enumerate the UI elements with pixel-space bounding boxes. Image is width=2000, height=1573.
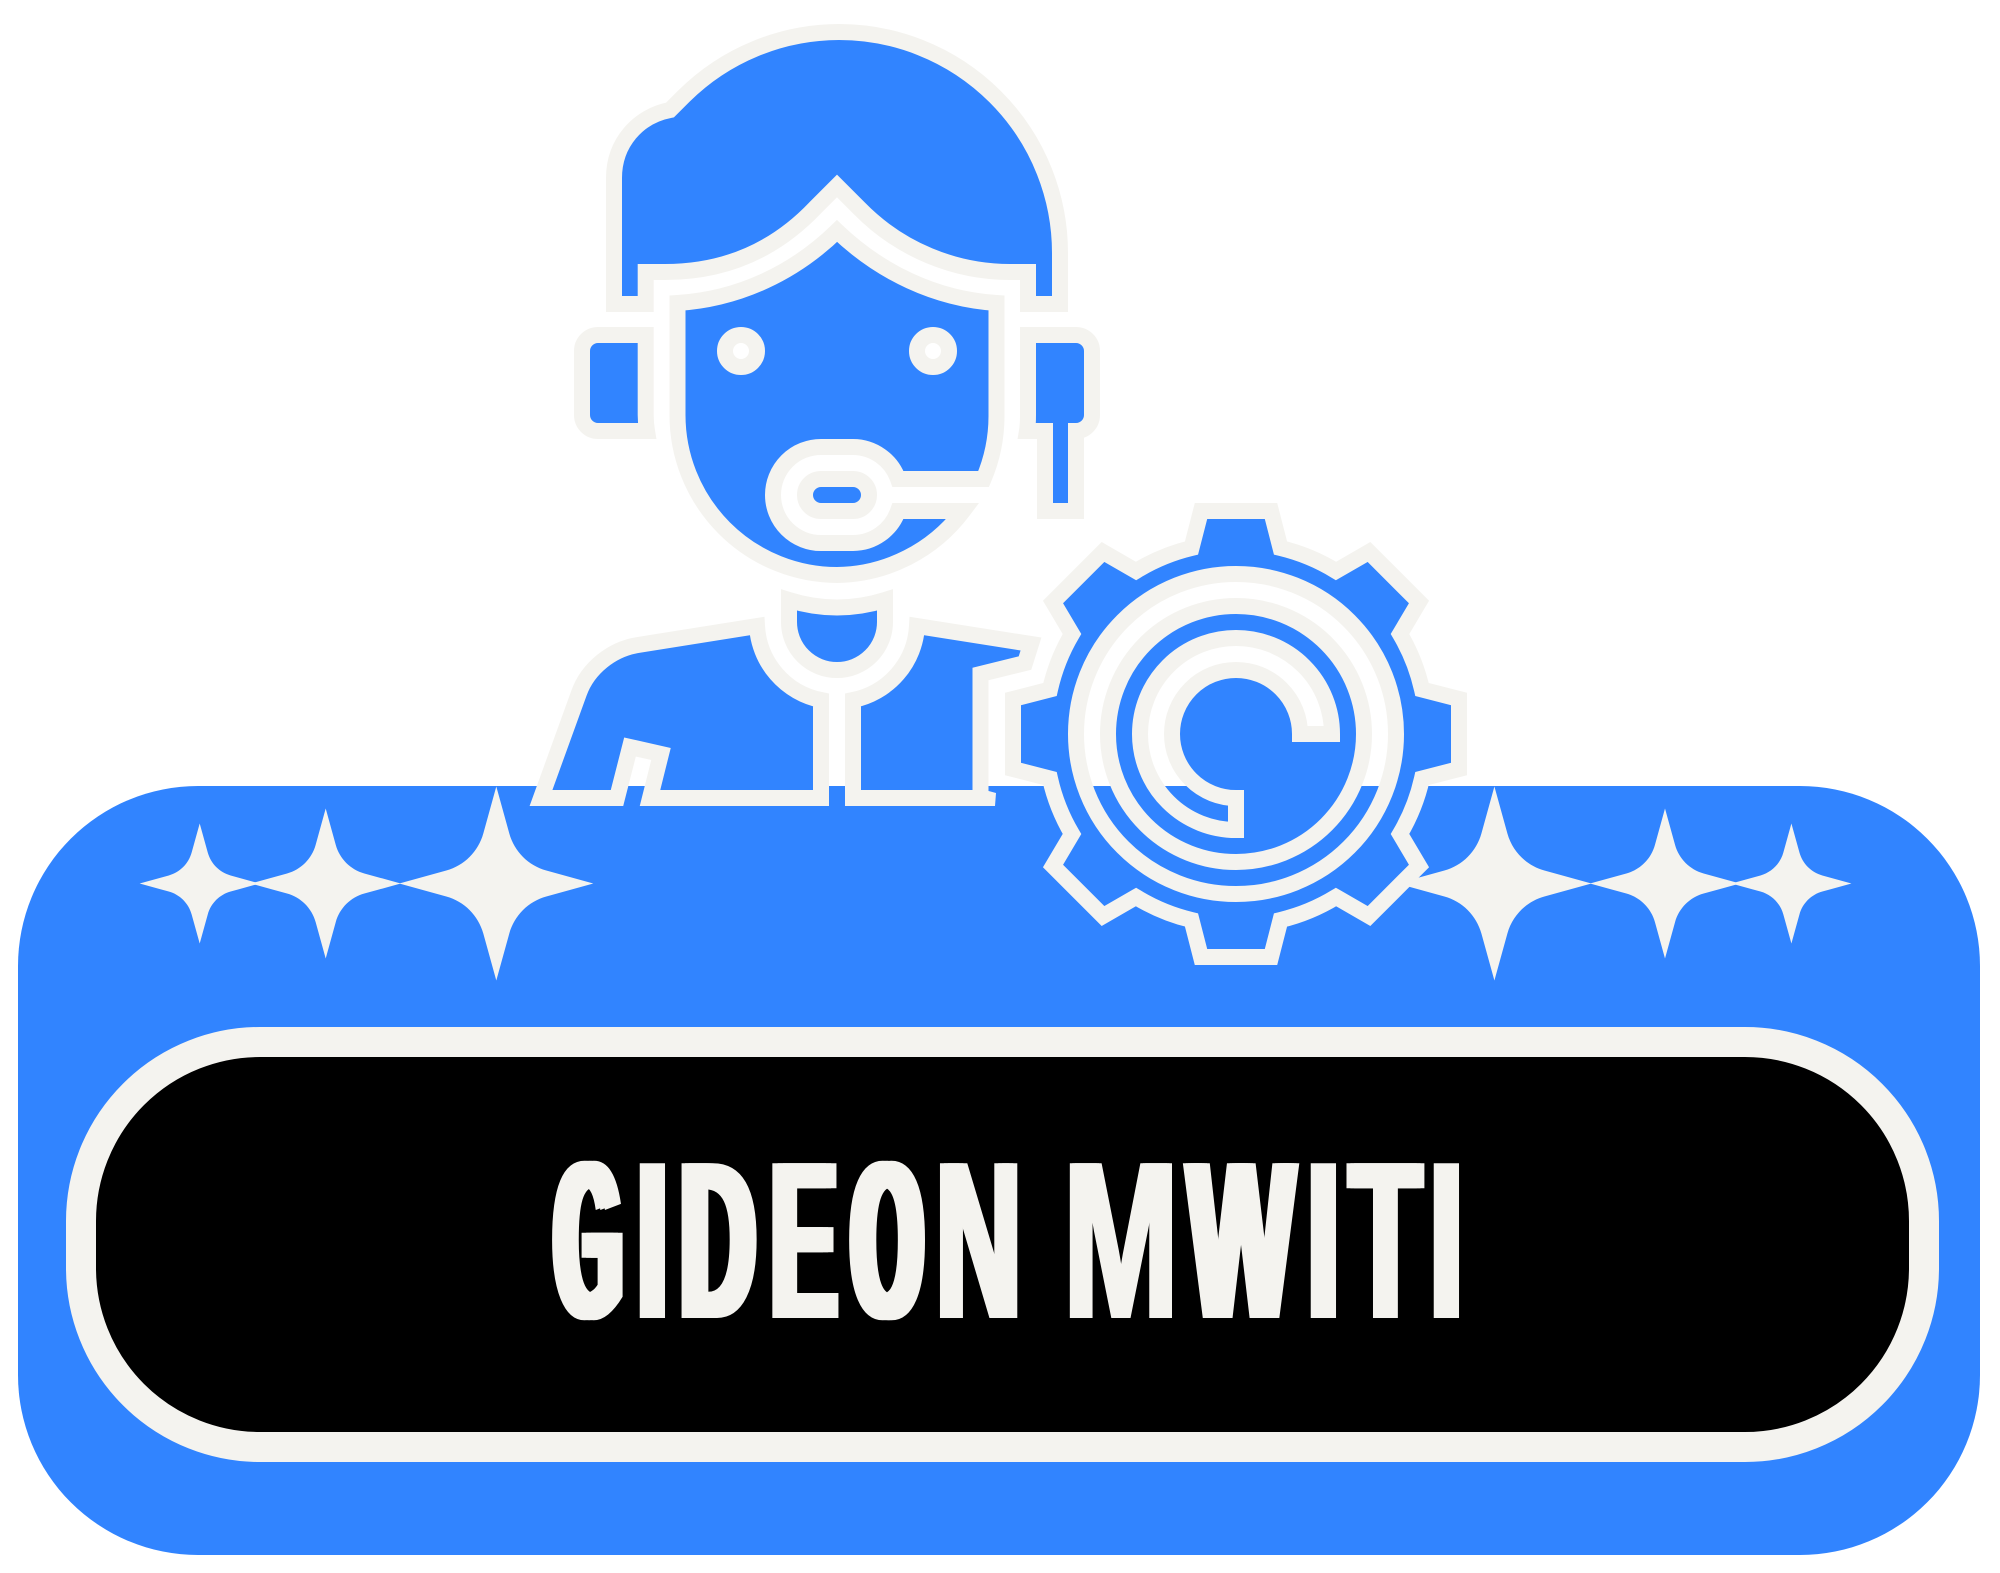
panel: blue background (18, 786, 1980, 1555)
neck (789, 600, 885, 670)
face (678, 231, 997, 575)
stars: right group (1397, 786, 1851, 980)
left ear cup (582, 335, 647, 431)
right ear cup and microphone stem (1027, 335, 1092, 511)
icon: gear with spiral (1013, 511, 1459, 957)
hair (614, 32, 1060, 304)
title: name text: I (628, 1114, 677, 1366)
title: name text: E (771, 1114, 837, 1366)
banner: black rounded box (81, 1042, 1924, 1447)
icon: support agent with headset (541, 32, 1092, 798)
title: name text: O (849, 1122, 925, 1389)
title: name text: I (1422, 1114, 1471, 1366)
title: name text: I (1299, 1114, 1348, 1366)
title: name text: M (1063, 1114, 1179, 1366)
left shoulder (541, 626, 821, 798)
title: name text: N (936, 1114, 1021, 1366)
title: name text: W (1188, 1114, 1294, 1366)
collar tail (985, 790, 996, 806)
right eye (917, 335, 949, 367)
title: name text: D (676, 1122, 759, 1389)
right shoulder (853, 626, 1031, 798)
title: name text: T (1348, 1114, 1421, 1366)
stars: left group (140, 786, 593, 980)
left eye (725, 335, 757, 367)
title: name text: G (552, 1122, 624, 1389)
mouthpiece (805, 479, 869, 511)
title: name text (552, 1114, 1471, 1389)
